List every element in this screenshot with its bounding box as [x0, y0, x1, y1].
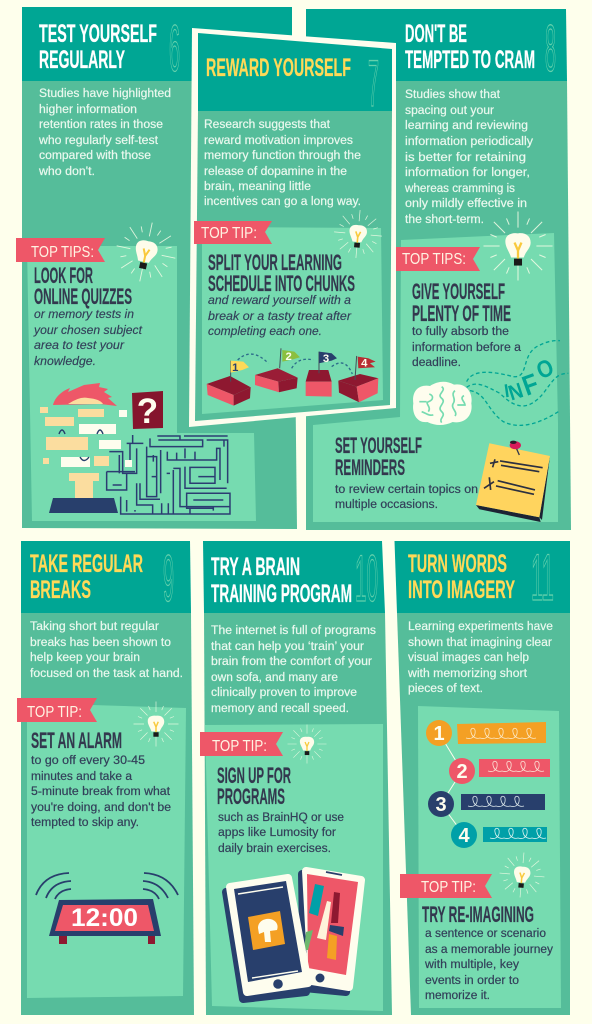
panel: try a brain training program [200, 541, 392, 1015]
body text: cram: Studies show that [405, 89, 501, 101]
body text: breaks [30, 621, 183, 680]
body text: reward: release of dopamine in the [204, 166, 347, 178]
body text: reward: incentives can go a long way. [204, 196, 361, 208]
illustration: brick head [40, 383, 132, 513]
body text: imagery [407, 621, 553, 695]
heading: brain training: TRAINING PROGRAM [211, 580, 352, 608]
body text: imagery: pieces of text. [408, 683, 483, 695]
icon: light bulb [110, 216, 182, 288]
heading: brain training: TRY A BRAIN [211, 553, 300, 581]
tip text: online quizzes: knowledge. [34, 356, 96, 368]
body text: brain training: memory and recall speed. [211, 703, 349, 715]
tip heading: sign up for programs [217, 763, 291, 809]
ribbon: top tips: TOP TIPS: [402, 251, 466, 268]
heading: turn words into imagery: TURN WORDS [408, 550, 507, 578]
tip text: alarm: to go off every 30-45 [31, 755, 145, 767]
tip text: online quizzes: area to test your [34, 340, 125, 352]
panel: take regular breaks [17, 541, 194, 1015]
body text: brain training [211, 625, 376, 715]
illustration: info trails [467, 341, 568, 425]
tip heading: set yourself reminders [335, 433, 422, 480]
ribbon: top tip [200, 732, 283, 756]
tip heading: give yourself plenty of time: GIVE YOURSELF [412, 279, 505, 304]
body text: cram: is better for retaining [405, 152, 526, 164]
tip heading: split your learning: SPLIT YOUR LEARNING [208, 250, 342, 275]
panel: try a brain training program: 10 [355, 541, 378, 615]
ribbon: top tips [16, 238, 105, 262]
panel: test yourself regularly [16, 7, 297, 529]
body text: reward: brain, meaning little [204, 181, 311, 193]
tip box: test yourself [27, 246, 256, 521]
ribbon: top tip [17, 698, 97, 722]
ribbon: top tip [400, 874, 492, 898]
tip text: plenty of time: deadline. [412, 357, 461, 369]
tip heading: look for online quizzes [34, 263, 132, 309]
body text: cram [404, 89, 533, 226]
tip text: chunks: break or a tasty treat after [208, 311, 352, 323]
body text: test yourself: retention rates in those [39, 119, 163, 131]
illustration: brain [413, 382, 472, 425]
illustration: info trails: N [505, 378, 526, 405]
body text: cram: spacing out your [405, 105, 494, 117]
ribbon: top tips: TOP TIPS: [31, 244, 94, 261]
illustration: numbered journey: 4 [458, 825, 470, 847]
body text: imagery: visual images can help [408, 652, 529, 664]
body text: reward [204, 119, 361, 208]
heading: take regular breaks: TAKE REGULAR [30, 550, 143, 578]
tip text: alarm: you're doing, and don't be [31, 802, 171, 814]
heading: don't be tempted to cram [405, 20, 535, 74]
illustration: numbered journey: 3 [435, 794, 447, 816]
tip heading: look for online quizzes: LOOK FOR [34, 263, 93, 288]
illustration: numbered journey [426, 720, 550, 848]
ribbon: top tip: TOP TIP: [27, 704, 82, 721]
illustration: alarm clock [36, 873, 178, 944]
tip heading: look for online quizzes: ONLINE QUIZZES [34, 284, 132, 309]
tip text: plenty of time: to fully absorb the [412, 326, 509, 338]
tip text: chunks: completing each one. [208, 326, 322, 338]
panel: reward yourself [189, 28, 396, 427]
tip text: re-imagining: with multiple, key [424, 959, 519, 971]
tip text: re-imagining: as a memorable journey [425, 944, 553, 956]
body text: reward: Research suggests that [204, 119, 331, 131]
tip heading: set yourself reminders: SET YOURSELF [335, 433, 422, 458]
tip text: re-imagining: events in order to [425, 975, 519, 987]
panel: reward yourself: 7 [368, 46, 379, 120]
tip text: re-imagining: a sentence or scenario [425, 928, 546, 940]
body text: brain training: own sofa, and many are [211, 672, 338, 684]
tip text: alarm: 5-minute break from what [31, 786, 171, 798]
body text: imagery: Learning experiments have [408, 621, 553, 633]
illustration: info trails: I [503, 380, 510, 401]
tip heading: set yourself reminders: REMINDERS [335, 455, 405, 480]
tip heading: sign up for programs: PROGRAMS [217, 784, 285, 809]
frame [189, 28, 396, 427]
icon: question mark card [132, 391, 163, 431]
body text: test yourself [38, 88, 171, 178]
panel: don't be tempted to cram: 8 [545, 11, 556, 85]
ribbon: top tip [194, 221, 272, 244]
body text: brain training: brain from the comfort of your [211, 656, 372, 668]
illustration: boxes and flags: 4 [361, 358, 368, 370]
ribbon: top tip: TOP TIP: [201, 225, 257, 242]
body text: test yourself: Studies have highlighted [39, 88, 171, 100]
body text: reward: reward motivation improves [204, 135, 353, 147]
illustration: numbered journey: 1 [433, 723, 445, 745]
icon: light bulb [134, 702, 178, 746]
tip text: online quizzes: or memory tests in [34, 309, 134, 321]
tip text: alarm: tempted to skip any. [31, 817, 139, 829]
illustration: alarm clock: 12:00 [71, 904, 138, 932]
tip text: alarm [31, 755, 171, 829]
body text: brain training: clinically proven to improve [211, 687, 357, 699]
ribbon: top tip: TOP TIP: [421, 879, 476, 896]
illustration: boxes and flags [207, 348, 378, 406]
body text: test yourself: compared with those [39, 150, 151, 162]
illustration: boxes and flags: 2 [286, 351, 292, 363]
body text: cram: only mildly effective in [405, 198, 527, 210]
body text: brain training: that can help you ‘train’ your [211, 641, 364, 653]
ribbon: top tips [394, 247, 480, 271]
panel: don't be tempted to cram [306, 9, 571, 530]
tip text: programs [218, 812, 344, 855]
heading: take regular breaks: BREAKS [30, 576, 91, 604]
panel: turn words into imagery [394, 540, 570, 1015]
tip text: chunks [208, 295, 352, 338]
illustration: maze [107, 435, 230, 514]
tip heading: set an alarm: SET AN ALARM [31, 728, 122, 753]
body text: imagery: with memorizing short [407, 668, 528, 680]
heading: brain training [211, 553, 352, 608]
body text: cram: learning and reviewing [405, 120, 528, 132]
illustration: numbered journey: 2 [456, 761, 468, 783]
tip box: imagery [418, 706, 561, 1008]
tip text: programs: daily brain exercises. [218, 843, 331, 855]
tip text: chunks: and reward yourself with a [208, 295, 351, 307]
body text: breaks: focused on the task at hand. [30, 668, 183, 680]
tip text: online quizzes [33, 309, 143, 368]
tip text: reminders [335, 484, 478, 511]
tip text: reminders: to review certain topics on [335, 484, 478, 496]
tip box: brain training [205, 724, 383, 1011]
tip text: re-imagining [424, 928, 553, 1002]
icon: light bulb [498, 851, 546, 899]
tip box: breaks [27, 703, 186, 998]
body text: cram: information for longer, [405, 167, 530, 179]
tip text: plenty of time: information before a [412, 342, 522, 354]
body text: cram: whereas cramming is [404, 183, 515, 195]
body text: brain training: The internet is full of programs [211, 625, 376, 637]
body text: breaks: breaks has been shown to [30, 637, 171, 649]
body text: test yourself: higher information [39, 104, 137, 116]
body text: breaks: Taking short but regular [30, 621, 159, 633]
tip heading: give yourself plenty of time: PLENTY OF TIME [412, 301, 511, 326]
heading: test yourself regularly: REGULARLY [39, 46, 125, 74]
illustration: info trails: O [533, 354, 558, 385]
icon: light bulb [332, 208, 384, 260]
panel: test yourself regularly: 6 [169, 11, 180, 85]
body text: reward: memory function through the [204, 150, 361, 162]
tip heading: split your learning [208, 250, 355, 296]
heading: take regular breaks [30, 550, 143, 604]
tip text: reminders: multiple occasions. [335, 499, 438, 511]
tip heading: sign up for programs: SIGN UP FOR [217, 763, 291, 788]
illustration: boxes and flags: 3 [323, 353, 329, 365]
tip text: online quizzes: your chosen subject [33, 325, 143, 337]
illustration: info trails: F [518, 367, 542, 402]
icon: light bulb [288, 724, 326, 764]
tip text: re-imagining: memorize it. [425, 990, 490, 1002]
tip box: reward [202, 227, 383, 414]
tip text: alarm: minutes and take a [31, 771, 133, 783]
tip text: programs: apps like Lumosity for [218, 827, 336, 839]
body text: imagery: shown that imagining clear [408, 637, 552, 649]
ribbon: top tip: TOP TIP: [212, 738, 267, 755]
tip heading: split your learning: SCHEDULE INTO CHUNKS [208, 271, 355, 296]
tip heading: give yourself plenty of time [412, 279, 511, 326]
tip text: programs: such as BrainHQ or use [218, 812, 344, 824]
heading: turn words into imagery: INTO IMAGERY [408, 576, 515, 604]
body text: cram: information periodically [405, 136, 533, 148]
tip box: cram [313, 233, 558, 522]
heading: test yourself regularly: TEST YOURSELF [39, 20, 157, 48]
icon: sticky note [476, 441, 550, 522]
panel: take regular breaks: 9 [163, 541, 174, 615]
heading: don't be tempted to cram: DON'T BE [405, 20, 467, 48]
body text: cram: the short-term. [405, 214, 484, 226]
icon: light bulb [484, 212, 552, 280]
heading: turn words into imagery [408, 550, 515, 604]
illustration: boxes and flags: 1 [232, 362, 238, 374]
body text: test yourself: who regularly self-test [38, 135, 159, 147]
heading: reward yourself: REWARD YOURSELF [206, 54, 351, 82]
body text: test yourself: who don't. [38, 166, 95, 178]
illustration: phones [226, 871, 361, 999]
tip text: plenty of time [412, 326, 522, 369]
heading: test yourself regularly [39, 20, 157, 74]
body text: breaks: help keep your brain [30, 652, 140, 664]
icon: question mark card: ? [137, 392, 158, 431]
